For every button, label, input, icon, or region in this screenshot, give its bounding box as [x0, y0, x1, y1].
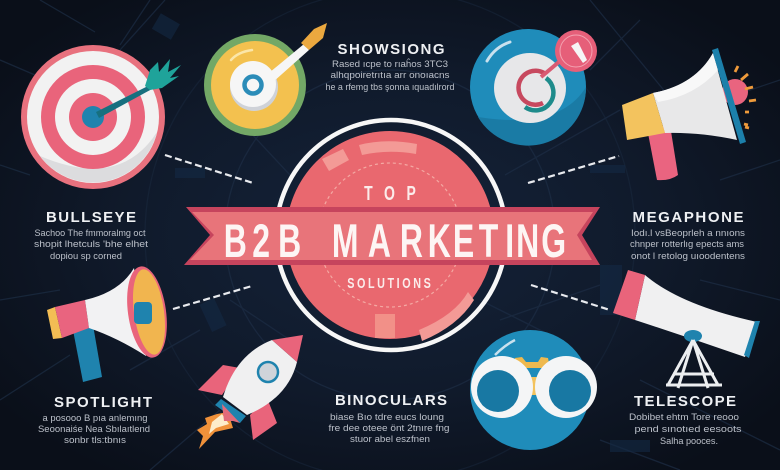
- heading and text: Showsiong: SHOWSIONG: [338, 41, 444, 58]
- heading and text: Spotlight: SPOTLIGHT: [54, 394, 152, 411]
- heading and text: Showsiong: [326, 41, 454, 93]
- heading and text: Spotlight: sonbr tls:tbnıs: [64, 435, 126, 446]
- heading and text: Bullseye: dopiou sp corned: [50, 251, 122, 262]
- icon: blue target with pink badge: [470, 29, 597, 146]
- icon: dart on yellow target: [204, 23, 327, 136]
- heading and text: Spotlight: [38, 394, 152, 446]
- dashed connector: megaphone to centre: [528, 156, 619, 183]
- heading and text: Bullseye: [34, 209, 148, 262]
- ribbon banner: [184, 207, 600, 265]
- text: Solutions: SOLUTIONS: [347, 274, 431, 291]
- heading and text: Showsiong: Rased ıcpe to rıaĥos 3TC3: [332, 58, 448, 70]
- heading and text: Binoculars: BINOCULARS: [335, 392, 447, 409]
- central badge: [184, 120, 600, 350]
- heading and text: Telescope: pend sınotıed eesoots: [634, 424, 742, 435]
- dashed connector: bullseye to centre: [165, 155, 253, 183]
- heading and text: Binoculars: stuor abel eszfnen: [350, 434, 430, 445]
- icon: rocket: [197, 335, 303, 449]
- title: B2B Marketing: [224, 215, 566, 268]
- dashed connector: telescope to centre: [531, 285, 610, 310]
- heading and text: Telescope: Salha pooces.: [660, 436, 718, 447]
- heading and text: Binoculars: fre dee oteee önt 2tnıre fng: [328, 423, 450, 434]
- title: B2B Marketing: B2B: [224, 215, 301, 268]
- heading and text: Bullseye: Sachoo The fmmoralmg oct: [34, 228, 146, 239]
- heading and text: Bullseye: shopit lhetculs 'bhe elhet: [34, 239, 148, 250]
- heading and text: Megaphone: onot l retolog uıoodentens: [631, 251, 745, 262]
- heading and text: Telescope: [629, 393, 742, 447]
- icon: binoculars: [470, 330, 597, 450]
- heading and text: Spotlight: a posooo B pıa anlemıng: [42, 413, 148, 424]
- heading and text: Megaphone: [630, 209, 745, 262]
- heading and text: Spotlight: Seoonaiśe Nea Sbılaıtlend: [38, 424, 150, 435]
- heading and text: Telescope: Dobibet ehtm Tore reooo: [629, 412, 739, 423]
- white ring: [276, 120, 506, 350]
- text: Top: TOP: [364, 181, 416, 205]
- icon: telescope on tripod: [613, 270, 760, 388]
- heading and text: Megaphone: Iodı.l vsBeoprleh a nnıons: [631, 228, 745, 239]
- heading and text: Showsiong: he a rfemg tbs şonna ıquadılrord: [326, 82, 454, 93]
- dashed connector: spotlight to centre: [173, 286, 252, 309]
- heading and text: Megaphone: MEGAPHONE: [632, 209, 744, 226]
- heading and text: Bullseye: BULLSEYE: [46, 209, 136, 226]
- icon: spotlight megaphone: [47, 264, 172, 382]
- heading and text: Showsiong: alhqpoiretrıtıa arr onoıacns: [330, 70, 450, 81]
- heading and text: Megaphone: chnper rotterlıg epects ams: [630, 239, 744, 250]
- icon: megaphone with yellow grip: [622, 48, 756, 180]
- title: B2B Marketing: MARKETING: [332, 215, 566, 268]
- heading and text: Binoculars: [328, 392, 450, 445]
- heading and text: Binoculars: biase Bıo tdre eucs loung: [330, 412, 444, 423]
- icon: bullseye target with arrow: [21, 45, 181, 189]
- pink disc: [286, 131, 494, 339]
- heading and text: Telescope: TELESCOPE: [634, 393, 736, 410]
